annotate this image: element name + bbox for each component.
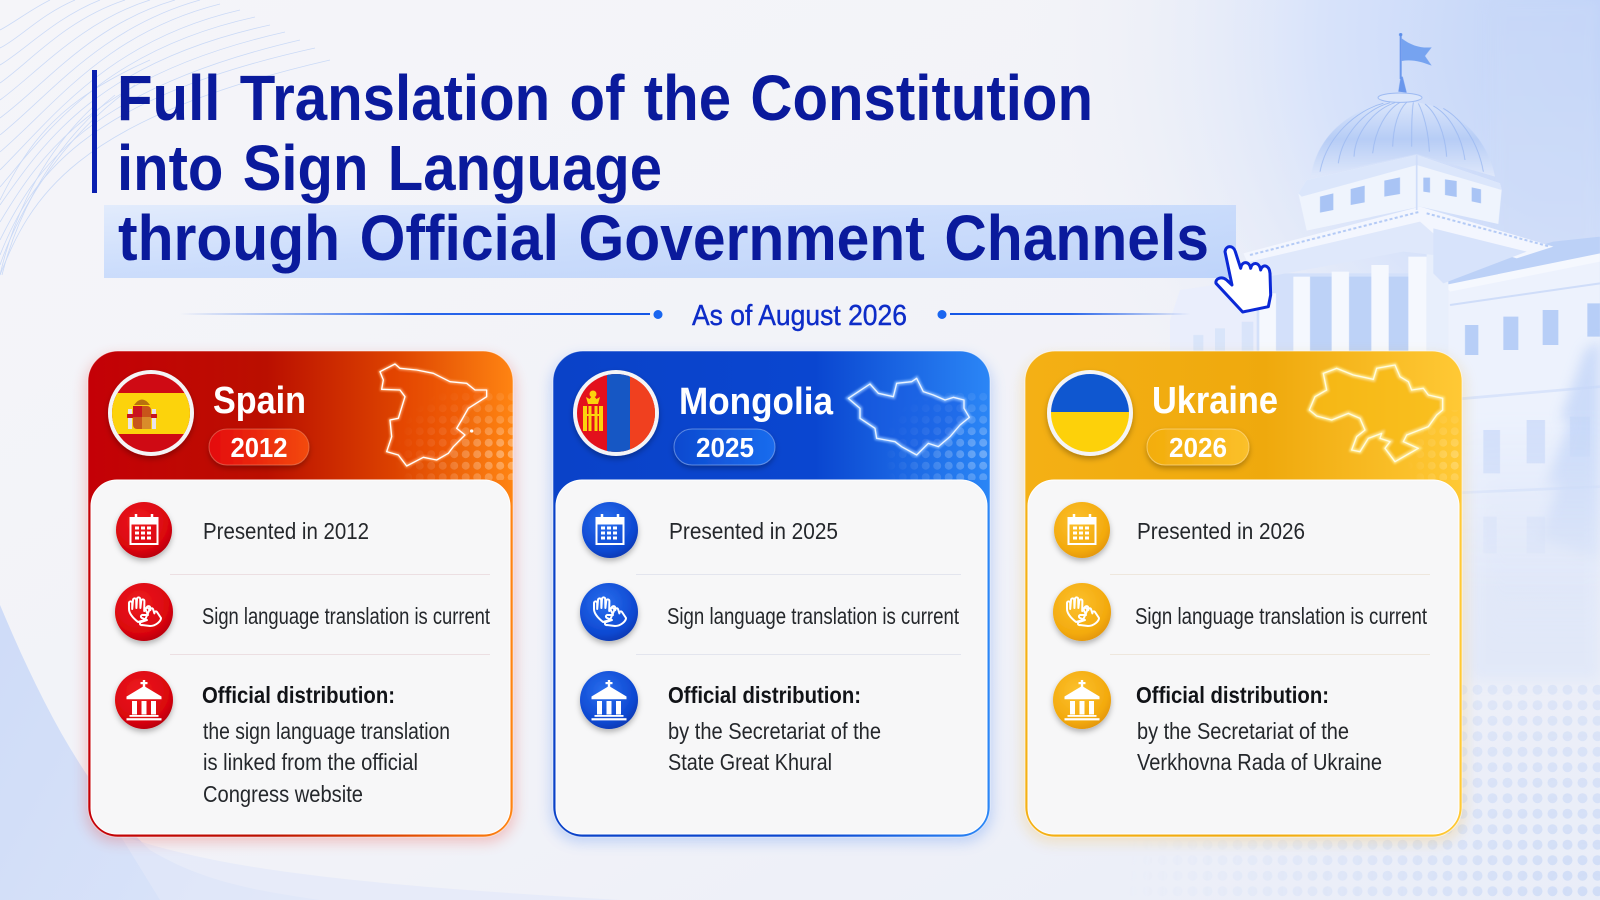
year pill: 2026 bbox=[1169, 432, 1227, 463]
row: official distribution: Verkhovna Rada of Ukraine bbox=[1137, 749, 1382, 775]
row: official distribution: by the Secretariat of the bbox=[668, 718, 881, 744]
left faint wing bbox=[1170, 273, 1297, 387]
flag bbox=[1402, 38, 1432, 66]
title highlight band bbox=[104, 205, 1236, 278]
drum bbox=[1298, 155, 1502, 231]
row: sign language: Sign language translation is current bbox=[202, 603, 490, 629]
panel: Mongolia bbox=[551, 351, 992, 842]
date line bbox=[180, 300, 1190, 332]
year pill bbox=[1147, 429, 1249, 465]
icon: government building bbox=[115, 671, 173, 729]
icon: signing hands bbox=[1053, 583, 1111, 641]
wing right bbox=[1448, 262, 1600, 510]
country name: Mongolia bbox=[679, 381, 834, 423]
portico bbox=[1257, 273, 1443, 387]
title line 2: into Sign Language bbox=[117, 132, 662, 204]
row: presented: Presented in 2025 bbox=[669, 518, 838, 544]
panel: Ukraine bbox=[1023, 351, 1464, 842]
year pill bbox=[674, 429, 775, 465]
row: sign language bbox=[1053, 583, 1427, 641]
map: Spain bbox=[380, 364, 487, 466]
row: presented bbox=[116, 502, 369, 558]
row: presented: Presented in 2026 bbox=[1137, 518, 1305, 544]
icon: calendar bbox=[116, 502, 172, 558]
card body bbox=[91, 480, 510, 834]
title line 1: Full Translation of the Constitution bbox=[117, 62, 1093, 134]
title bbox=[92, 62, 1236, 278]
row: sign language bbox=[115, 583, 490, 641]
year pill bbox=[209, 429, 309, 465]
row: official distribution: Official distribution: bbox=[202, 682, 395, 708]
title accent bar bbox=[92, 70, 97, 193]
title line 3: through Official Government Channels bbox=[118, 202, 1209, 274]
flag: Spain bbox=[108, 370, 194, 456]
row: official distribution bbox=[115, 671, 450, 807]
year pill: 2025 bbox=[696, 432, 754, 463]
row: official distribution bbox=[1053, 671, 1382, 775]
icon: government building bbox=[580, 671, 638, 729]
lantern bbox=[1378, 93, 1422, 102]
panel: Spain bbox=[86, 351, 515, 842]
row: official distribution bbox=[580, 671, 881, 775]
card body bbox=[1028, 480, 1459, 834]
flag: Mongolia bbox=[573, 370, 660, 456]
icon: calendar bbox=[582, 502, 638, 558]
row: sign language: Sign language translation is current bbox=[667, 603, 959, 629]
map: Ukraine bbox=[1309, 365, 1443, 462]
row: sign language bbox=[580, 583, 959, 641]
row: presented bbox=[582, 502, 838, 558]
row: official distribution: the sign language translation bbox=[203, 718, 450, 744]
entablature bbox=[1243, 207, 1553, 268]
row: presented bbox=[1054, 502, 1305, 558]
row: sign language: Sign language translation is current bbox=[1135, 603, 1427, 629]
year pill: 2012 bbox=[230, 432, 288, 463]
tree bbox=[1546, 341, 1600, 547]
map: Mongolia bbox=[848, 378, 969, 455]
row: official distribution: Official distribution: bbox=[1136, 682, 1329, 708]
row: presented: Presented in 2012 bbox=[203, 518, 369, 544]
flag: Ukraine bbox=[1047, 370, 1133, 456]
icon: calendar bbox=[1054, 502, 1110, 558]
country name: Spain bbox=[213, 380, 306, 422]
icon: pointing hand cursor bbox=[1216, 247, 1271, 312]
card body bbox=[556, 480, 987, 834]
row: official distribution: State Great Khural bbox=[668, 749, 832, 775]
icon: government building bbox=[1053, 671, 1111, 729]
row: official distribution: Official distribution: bbox=[668, 682, 861, 708]
row: official distribution: Congress website bbox=[203, 781, 363, 807]
row: official distribution: is linked from the official bbox=[203, 749, 418, 775]
dome bbox=[1311, 102, 1495, 177]
country name: Ukraine bbox=[1152, 380, 1278, 422]
date text: As of August 2026 bbox=[692, 300, 907, 332]
background building with dome and flag bbox=[1193, 33, 1600, 523]
icon: signing hands bbox=[115, 583, 173, 641]
icon: signing hands bbox=[580, 583, 638, 641]
row: official distribution: by the Secretariat of the bbox=[1137, 718, 1349, 744]
